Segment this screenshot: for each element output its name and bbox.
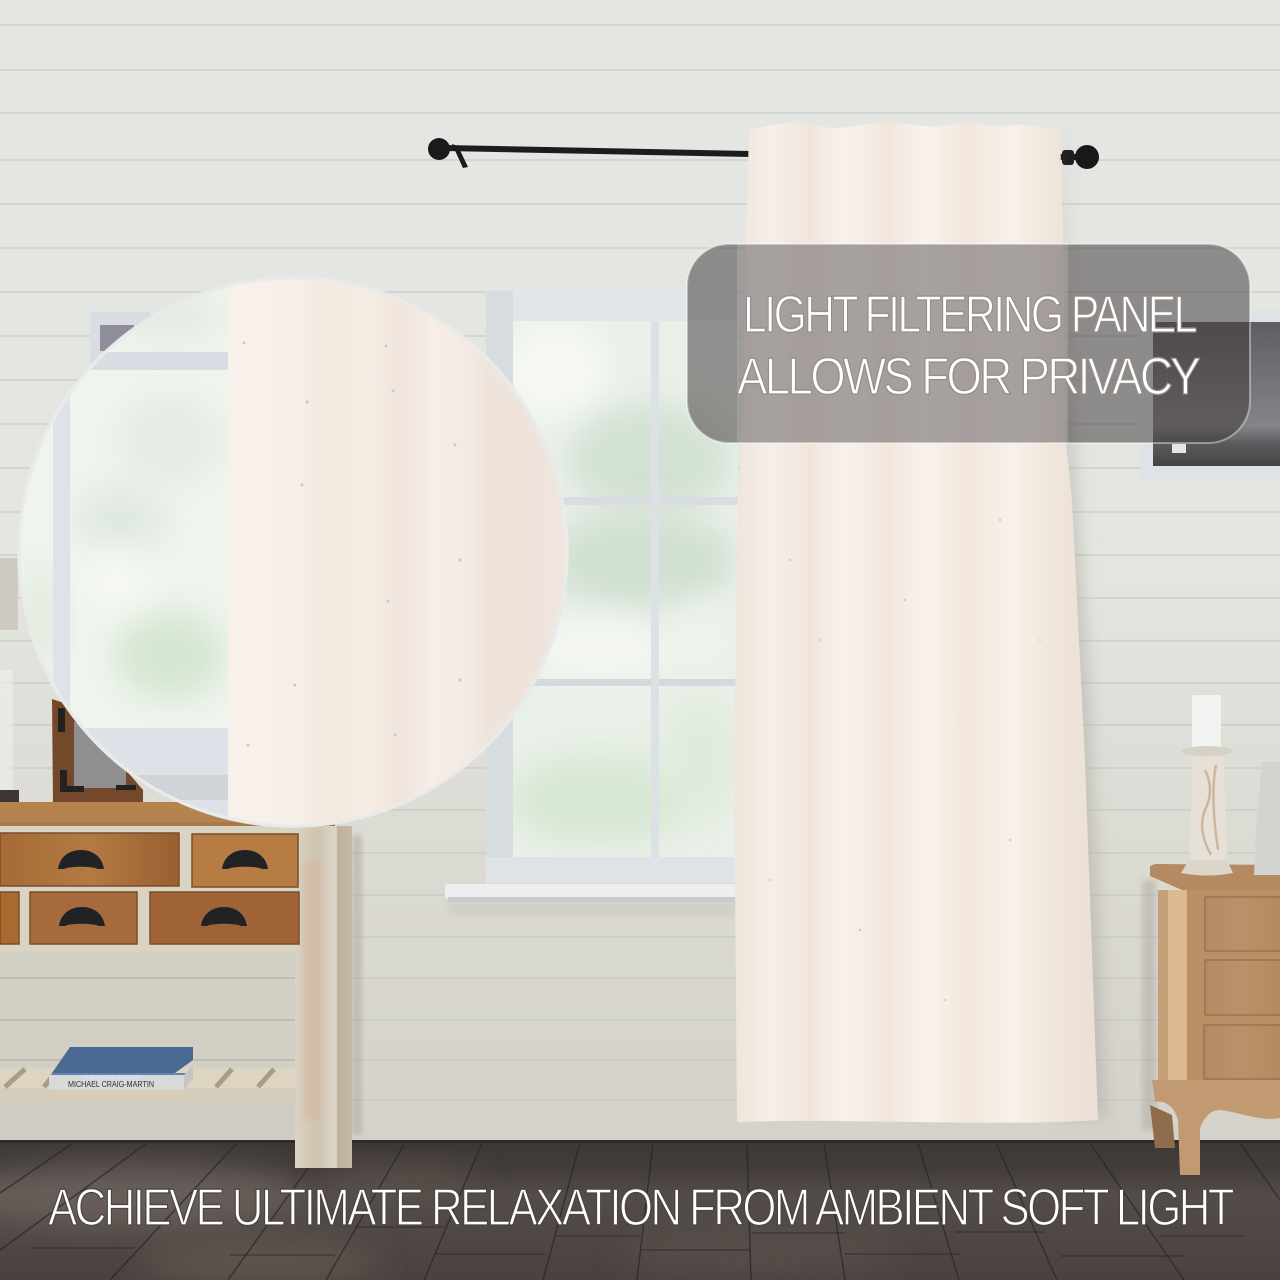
books: MICHAEL CRAIG-MARTIN [68, 1079, 154, 1089]
console table [0, 670, 362, 1168]
candle holder [1181, 695, 1233, 876]
books: THE WATER GARDEN [84, 1075, 140, 1081]
rear foot [1150, 1105, 1175, 1148]
callout panel [687, 244, 1250, 443]
magnified circle detail [18, 278, 570, 828]
lower shelf [0, 1069, 296, 1102]
textured object at left edge [0, 558, 18, 630]
right chest of drawers [1142, 864, 1280, 1175]
fabric speckles [769, 519, 1041, 1001]
glass cloche [0, 670, 19, 805]
vase [1254, 762, 1280, 875]
drawers [0, 833, 299, 944]
curtain panel [734, 123, 1098, 1123]
callout text: ALLOWS FOR PRIVACY [737, 348, 1200, 406]
curtain rod [428, 138, 1099, 169]
photo frame [52, 699, 143, 805]
wall art left [90, 312, 150, 372]
drawer handles [58, 850, 268, 926]
books [49, 1047, 193, 1090]
floor [0, 1140, 1280, 1280]
magnified speckles [242, 342, 462, 746]
window [445, 291, 740, 916]
callout text: LIGHT FILTERING PANEL [743, 286, 1197, 344]
framed wall art right [1141, 310, 1280, 480]
callout text [737, 286, 1200, 406]
chest shadow on wall [1142, 880, 1156, 1130]
curtain shadow on wall [1060, 135, 1106, 1118]
table shadow on wall [352, 835, 362, 1135]
